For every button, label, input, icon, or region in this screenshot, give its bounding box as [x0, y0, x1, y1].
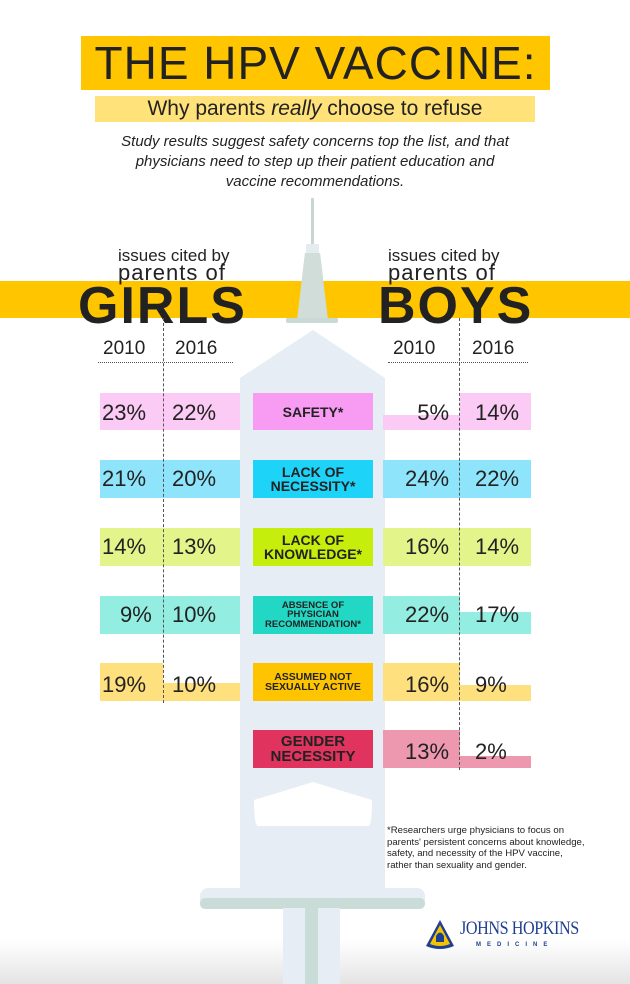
- percentages: 22%: [172, 400, 216, 425]
- footnote: [387, 825, 585, 870]
- percentages: 20%: [172, 466, 216, 491]
- label: lack of knowledge: LACK OF: [282, 532, 344, 548]
- year headers: [98, 338, 233, 363]
- percentages: 16%: [405, 534, 449, 559]
- label: lack of necessity: LACK OF: [282, 464, 344, 480]
- percentages: 2%: [475, 739, 507, 764]
- percentages: 22%: [475, 466, 519, 491]
- girls heading: issues cited by: [118, 246, 230, 265]
- footnote: rather than sexuality and gender.: [387, 860, 527, 870]
- percentages: 23%: [102, 400, 146, 425]
- logo: [426, 918, 579, 949]
- percentages: 5%: [417, 400, 449, 425]
- text: 2010: [393, 338, 435, 359]
- percentages: 17%: [475, 602, 519, 627]
- percentages: 22%: [405, 602, 449, 627]
- boys heading: [378, 246, 533, 335]
- label: lack of knowledge: KNOWLEDGE*: [264, 546, 362, 562]
- percentages: 13%: [172, 534, 216, 559]
- year headers: 2016: [175, 338, 217, 359]
- girls heading: [78, 246, 247, 335]
- label: gender necessity: [253, 730, 373, 768]
- label: assumed not sexually active: [253, 663, 373, 701]
- label: safety: SAFETY*: [283, 404, 343, 420]
- syringe cone over band: [286, 254, 338, 323]
- year headers: 2010: [103, 338, 145, 359]
- label: lack of necessity: NECESSITY*: [271, 478, 355, 494]
- label: safety: [253, 393, 373, 430]
- label: assumed not sexually active: SEXUALLY ACTIVE: [265, 681, 361, 693]
- label: assumed not sexually active: ASSUMED NOT: [274, 670, 352, 682]
- footnote: safety, and necessity of the HPV vaccine,: [387, 848, 563, 859]
- boys heading: BOYS: [378, 277, 533, 335]
- label: lack of necessity: [253, 460, 373, 498]
- intro text: [121, 133, 510, 190]
- boys heading: issues cited by: [388, 246, 500, 265]
- title: THE HPV VACCINE:: [94, 37, 536, 89]
- footnote: parents' persistent concerns about knowledge,: [387, 836, 585, 848]
- footnote: *Researchers urge physicians to focus on: [387, 825, 564, 836]
- percentages: 9%: [475, 672, 507, 697]
- percentages: 13%: [405, 739, 449, 764]
- label: physician recommendation: PHYSICIAN: [287, 609, 339, 620]
- percentages: 10%: [172, 602, 216, 627]
- percentages: 19%: [102, 672, 146, 697]
- percentages: 24%: [405, 466, 449, 491]
- boys heading: parents of: [388, 260, 496, 285]
- label: gender necessity: NECESSITY: [270, 748, 356, 765]
- subtitle: Why parents really choose to refuse: [147, 97, 482, 120]
- percentages: 21%: [102, 466, 146, 491]
- label: lack of knowledge: [253, 528, 373, 566]
- girls heading: parents of: [118, 260, 226, 285]
- percentages: 9%: [120, 602, 152, 627]
- logo: MEDICINE: [476, 942, 553, 948]
- label: physician recommendation: [253, 596, 373, 634]
- intro text: vaccine recommendations.: [226, 173, 404, 190]
- label: physician recommendation: ABSENCE OF: [282, 600, 344, 611]
- text: 2016: [472, 338, 514, 359]
- logo: JOHNS HOPKINS: [460, 918, 579, 939]
- label: gender necessity: GENDER: [281, 733, 345, 750]
- girls heading: GIRLS: [78, 277, 247, 335]
- percentages: 14%: [475, 400, 519, 425]
- percentages: 16%: [405, 672, 449, 697]
- subtitle: [95, 96, 535, 122]
- intro text: physicians need to step up their patient education and: [136, 153, 494, 170]
- percentages: 10%: [172, 672, 216, 697]
- percentages: 14%: [475, 534, 519, 559]
- percentages: 14%: [102, 534, 146, 559]
- intro text: Study results suggest safety concerns top the list, and that: [121, 133, 509, 150]
- yellow band: [0, 281, 630, 318]
- label: physician recommendation: RECOMMENDATION*: [265, 619, 361, 630]
